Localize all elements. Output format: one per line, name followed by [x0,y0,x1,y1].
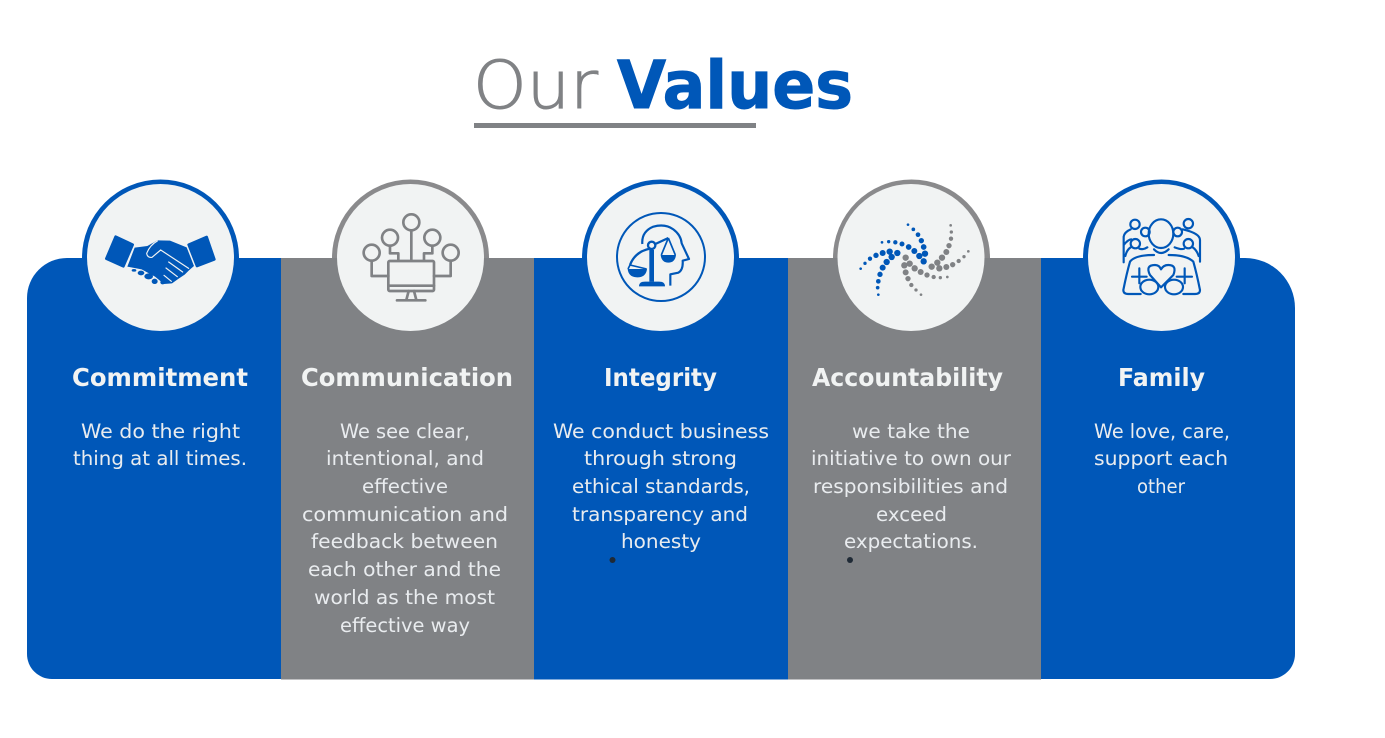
text: family description: We love, care, [1094,420,1230,443]
text: communication description: each other and the [308,558,501,581]
text: communication description: effective [362,475,448,498]
text: integrity description: honesty [621,530,701,553]
text: integrity description: ethical standards, [572,475,750,498]
text: commitment description: We do the right [81,420,240,443]
text: communication description: intentional, and [326,447,484,470]
icon: network monitor [332,180,489,331]
panel: communication [301,180,513,637]
title: Values [617,47,853,124]
text: accountability description [811,420,1012,553]
icon: scales and head [582,180,739,331]
panel: integrity [553,180,769,563]
text: communication description: world as the most [314,586,495,609]
text: accountability description: exceed [876,503,947,526]
text: communication description: feedback between [311,530,498,553]
stray bullet [610,557,616,563]
panel: accountability [811,180,1012,563]
text: family description: other [1137,475,1186,498]
text: integrity description: transparency and [572,503,748,526]
text: integrity description: We conduct business [553,420,769,443]
icon: family with heart [1083,180,1240,331]
heading: communication: Communication [301,363,513,392]
heading: integrity: Integrity [604,363,717,392]
text: integrity description: through strong [584,447,737,470]
values panel band [27,258,1295,680]
text: integrity description [553,420,769,553]
text: accountability description: we take the [852,420,970,443]
text: communication description: effective way [340,614,470,637]
panel: family [1083,180,1240,498]
text: communication description: We see clear, [340,420,470,443]
heading: accountability: Accountability [812,363,1003,392]
panel: commitment [72,180,248,470]
text: accountability description: responsibilities and [813,475,1008,498]
text: communication description: communication and [302,503,508,526]
text: accountability description: expectations. [844,530,978,553]
stray bullet [847,557,853,563]
text: family description: support each [1094,447,1228,470]
icon: dotted swirl [833,180,990,331]
text: commitment description: thing at all times. [73,447,247,470]
icon: handshake [82,180,239,331]
heading: commitment: Commitment [72,363,248,392]
title [473,47,853,128]
text: family description [1094,420,1230,498]
heading: family: Family [1118,363,1205,392]
text: communication description [302,420,508,637]
title: Our [473,47,599,124]
text: accountability description: initiative to own our [811,447,1012,470]
text: commitment description [73,420,247,470]
